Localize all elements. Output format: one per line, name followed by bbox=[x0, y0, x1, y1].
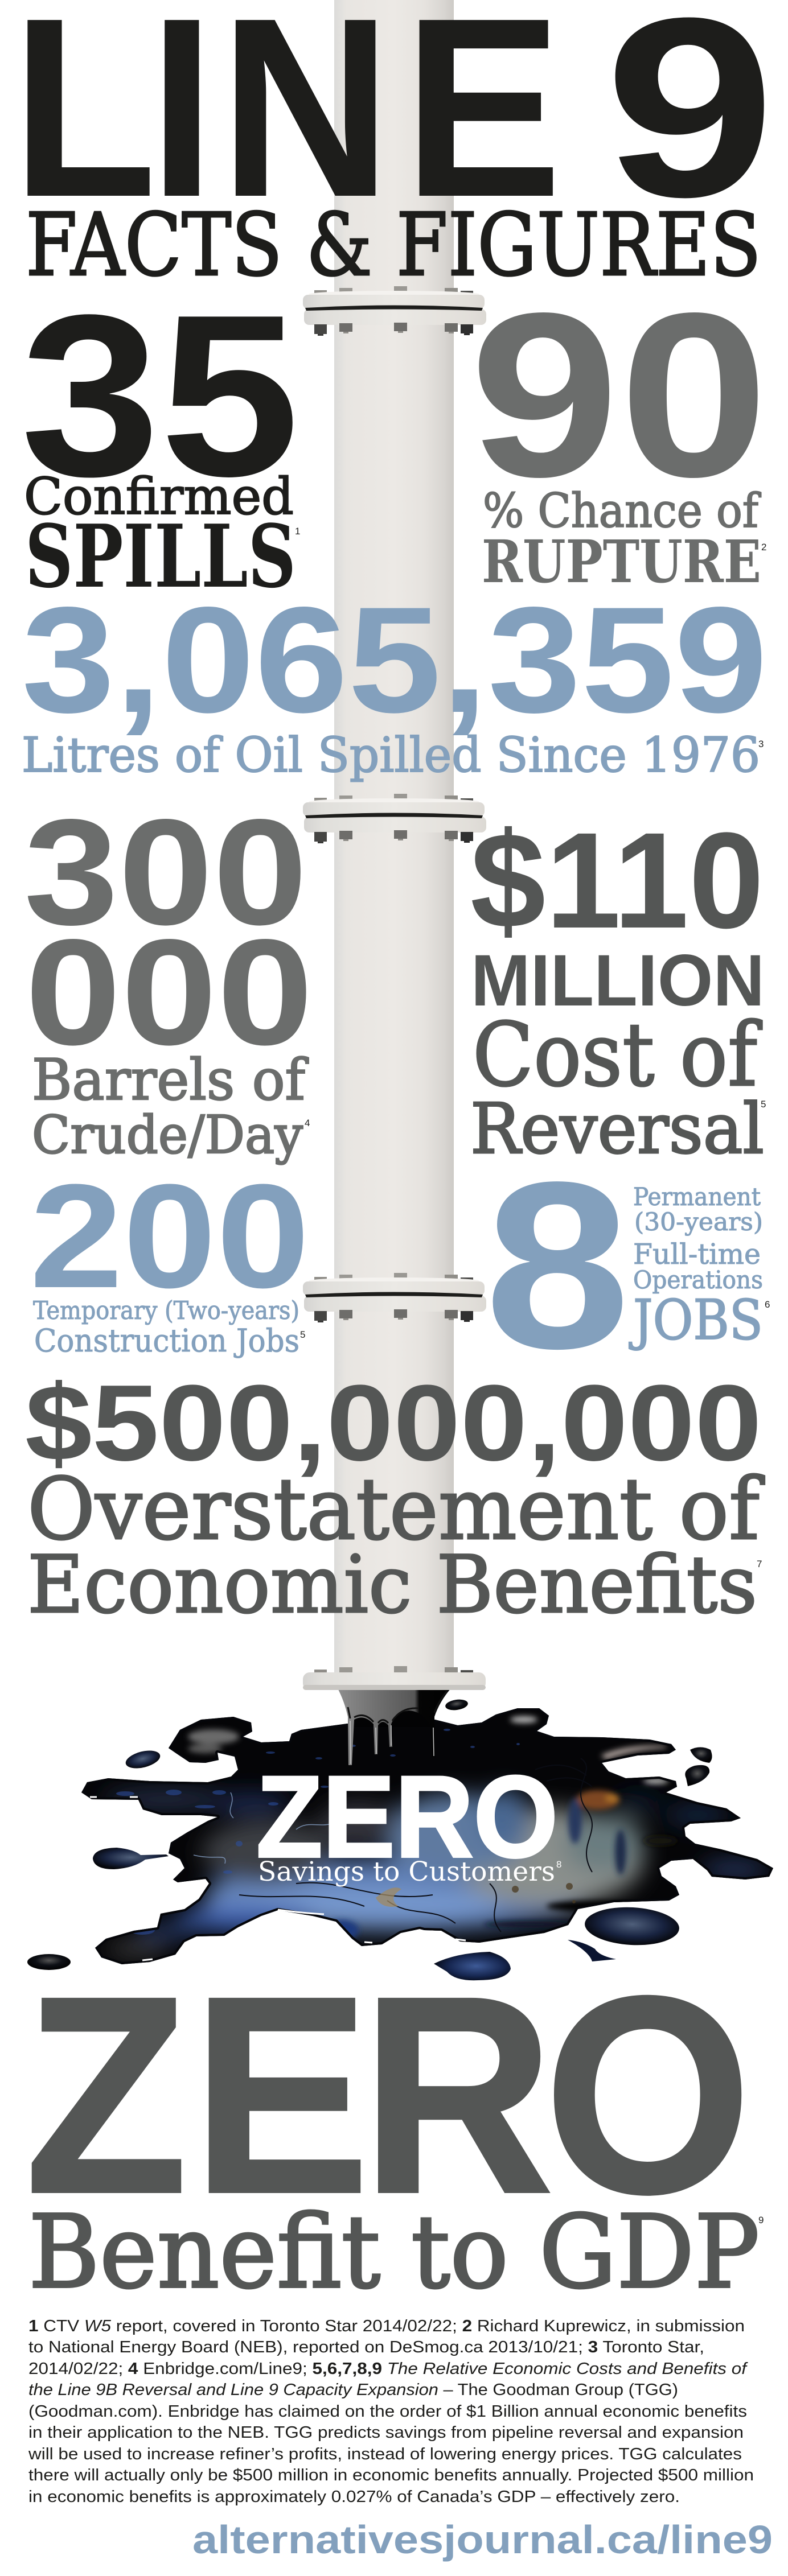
footnote mark: 7 bbox=[757, 1559, 762, 1569]
label operations: Operations bbox=[633, 1266, 763, 1295]
footnotes: 1 CTV W5 report, covered in Toronto Star 2014/02/22; 2 Richard Kuprewicz, in submission bbox=[28, 2317, 745, 2335]
label crude: Crude/Day bbox=[32, 1104, 303, 1165]
stat: 200 temporary jobs bbox=[30, 1154, 310, 1359]
million: MILLION bbox=[471, 940, 765, 1021]
number 3,065,359: 3,065,359 bbox=[22, 576, 768, 744]
flange 4 at pipe outlet bbox=[303, 1666, 486, 1690]
stat: 300 000 barrels bbox=[24, 788, 313, 1165]
footnotes bbox=[28, 2317, 754, 2506]
label jobs: JOBS bbox=[629, 1288, 763, 1352]
flange 1 bbox=[303, 286, 486, 336]
stat: 500 million overstatement bbox=[25, 1363, 765, 1631]
number $110: $110 bbox=[470, 804, 764, 957]
footnotes: 2014/02/22; 4 Enbridge.com/Line9; 5,6,7,8,9 The Relative Economic Costs and Benefits of bbox=[28, 2360, 748, 2378]
footnote mark: 5 bbox=[761, 1099, 766, 1110]
main oil slick bbox=[74, 1701, 780, 1975]
label thirty years: (30-years) bbox=[634, 1208, 763, 1237]
label construction: Construction Jobs bbox=[34, 1322, 299, 1359]
footnote mark: 1 bbox=[295, 526, 300, 537]
footnotes: will be used to increase refiner’s profits, instead of lowering energy prices. TGG calculates bbox=[28, 2445, 742, 2463]
stat: 110 million cost bbox=[470, 804, 766, 1169]
number zero: ZERO bbox=[256, 1752, 558, 1882]
stat: zero benefit to GDP bbox=[25, 1938, 764, 2311]
footnote mark: 3 bbox=[758, 739, 764, 749]
label chance: % Chance of bbox=[483, 484, 761, 538]
website url: alternativesjournal.ca/line9 bbox=[192, 2517, 773, 2562]
label overstatement: Overstatement of bbox=[27, 1460, 765, 1559]
flange 2 bbox=[303, 794, 486, 843]
number 200: 200 bbox=[30, 1154, 310, 1319]
stat: litres spilled bbox=[22, 576, 768, 783]
label barrels: Barrels of bbox=[32, 1048, 309, 1113]
footnotes: the Line 9B Reversal and Line 9 Capacity Expansion – The Goodman Group (TGG) bbox=[28, 2381, 678, 2399]
stat: 8 permanent jobs bbox=[485, 1132, 770, 1398]
footnote mark: 2 bbox=[761, 542, 766, 553]
footnote mark: 8 bbox=[556, 1859, 561, 1870]
stat on spill: zero savings bbox=[256, 1752, 561, 1887]
label permanent: Permanent bbox=[633, 1183, 761, 1211]
footnote mark: 4 bbox=[305, 1118, 310, 1128]
number $500,000,000: $500,000,000 bbox=[25, 1363, 762, 1483]
stat: 35 confirmed spills bbox=[20, 266, 300, 607]
stat: 90 percent chance of rupture bbox=[470, 265, 769, 596]
footnotes: (Goodman.com). Enbridge has claimed on the order of $1 Billion annual economic benefits bbox=[28, 2402, 747, 2421]
label spills: SPILLS bbox=[25, 505, 296, 607]
label reversal: Reversal bbox=[470, 1089, 764, 1169]
footnotes: there will actually only be $500 million in economic benefits annually. Projected $500 million bbox=[28, 2466, 754, 2484]
oil spill bbox=[27, 1688, 780, 1980]
oil droplets bbox=[27, 1698, 712, 1980]
label savings: Savings to Customers bbox=[258, 1856, 555, 1887]
footnotes: in economic benefits is approximately 0.027% of Canada’s GDP – effectively zero. bbox=[28, 2488, 680, 2506]
big zero: ZERO bbox=[25, 1938, 752, 2252]
label confirmed: Confirmed bbox=[24, 467, 294, 526]
label full-time: Full-time bbox=[633, 1238, 761, 1271]
label cost of: Cost of bbox=[473, 1004, 762, 1106]
label temporary: Temporary (Two-years) bbox=[33, 1296, 299, 1325]
number 90: 90 bbox=[470, 265, 769, 526]
footnote mark: 9 bbox=[758, 2215, 764, 2225]
label litres: Litres of Oil Spilled Since 1976 bbox=[22, 727, 760, 783]
number 300: 300 bbox=[24, 788, 307, 957]
number 000: 000 bbox=[25, 908, 313, 1077]
footnotes: to National Energy Board (NEB), reported on DeSmog.ca 2013/10/21; 3 Toronto Star, bbox=[28, 2338, 704, 2356]
number 35: 35 bbox=[20, 266, 299, 524]
number 8: 8 bbox=[485, 1132, 630, 1398]
footnotes: in their application to the NEB. TGG predicts savings from pipeline reversal and expansion bbox=[28, 2423, 744, 2442]
footnote mark: 6 bbox=[765, 1299, 770, 1310]
oil neck and drips bbox=[338, 1688, 451, 1765]
footnote mark: 5 bbox=[300, 1329, 305, 1340]
label economic benefits: Economic Benefits bbox=[27, 1539, 757, 1631]
flange 3 bbox=[303, 1273, 486, 1322]
label benefit: Benefit to GDP bbox=[28, 2194, 760, 2311]
pipe bbox=[334, 0, 454, 1676]
